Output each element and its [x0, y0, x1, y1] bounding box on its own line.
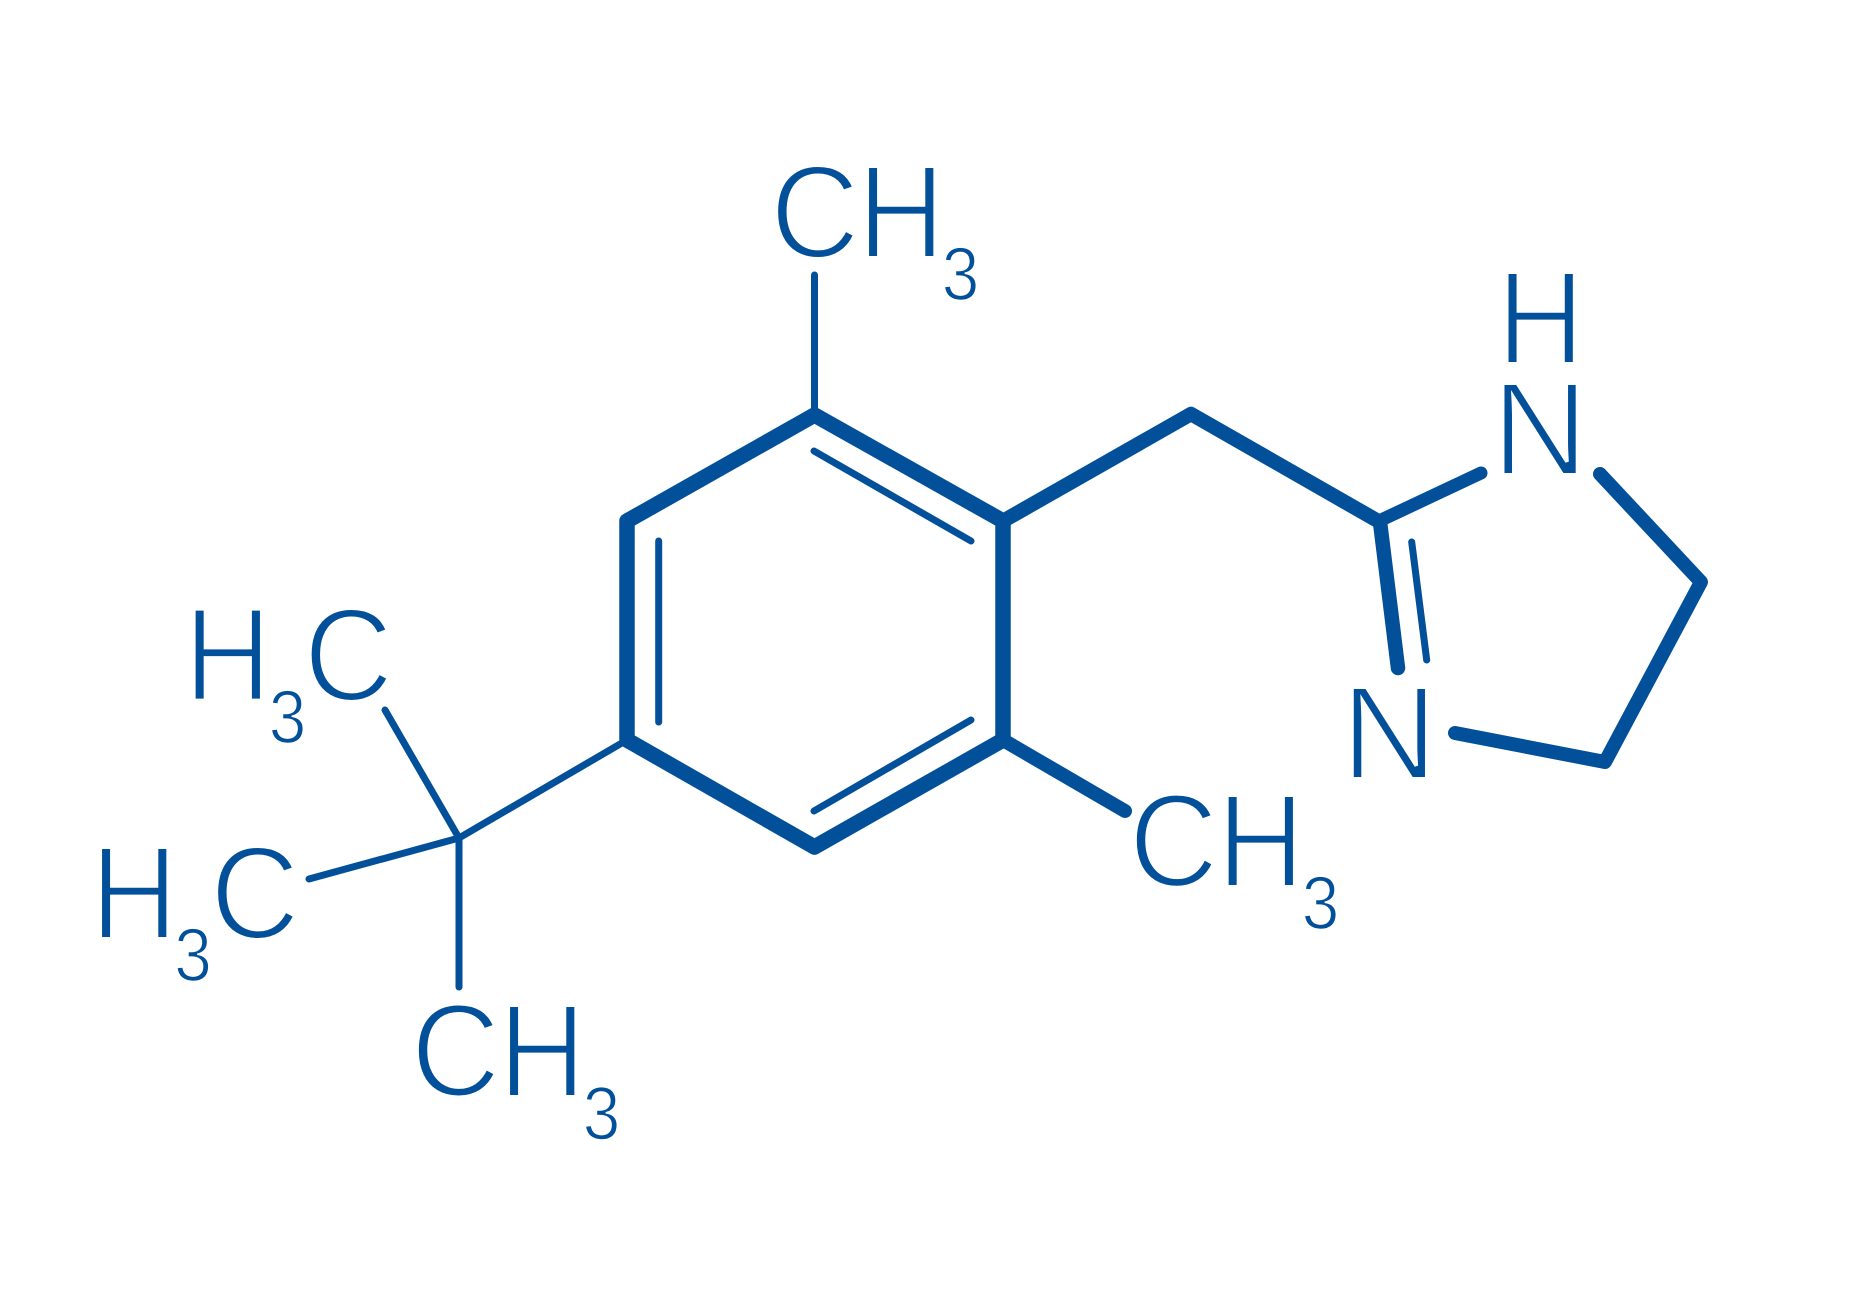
label: top CH3: C: [770, 139, 860, 286]
label: right CH3: C: [1129, 767, 1218, 915]
label: lower H3C: H: [90, 818, 178, 967]
label: lower H3C: C: [210, 820, 300, 967]
label: lower H3C: [90, 818, 300, 998]
label: upper H3C: H: [184, 580, 271, 729]
benzene ring: [627, 415, 1003, 847]
label: bottom CH3: H: [498, 976, 586, 1125]
label: bottom CH3: C: [411, 977, 500, 1125]
label: top CH3: H: [858, 137, 945, 286]
label: NH nitrogen: N: [1492, 355, 1588, 504]
label: right CH3: [1129, 766, 1339, 946]
imidazoline ring: [1379, 473, 1701, 762]
tert-butyl bonds: [309, 710, 627, 987]
label: upper H3C: 3: [269, 676, 306, 760]
label: top CH3: 3: [942, 233, 979, 317]
label: top CH3: [770, 137, 979, 317]
bond: ring to top methyl: [811, 275, 818, 415]
label: bottom CH3: [411, 976, 620, 1156]
label: lower H3C: 3: [174, 914, 212, 998]
label: upper H3C: C: [304, 582, 393, 729]
label: upper H3C: [184, 580, 393, 760]
label: imine nitrogen: N: [1341, 659, 1438, 808]
label: bottom CH3: 3: [583, 1072, 620, 1156]
label: right CH3: H: [1217, 766, 1304, 915]
methylene bridge: [1003, 414, 1378, 521]
bond: ring to right methyl: [1003, 740, 1125, 811]
label: NH hydrogen: H: [1497, 243, 1584, 392]
label: right CH3: 3: [1302, 862, 1339, 946]
